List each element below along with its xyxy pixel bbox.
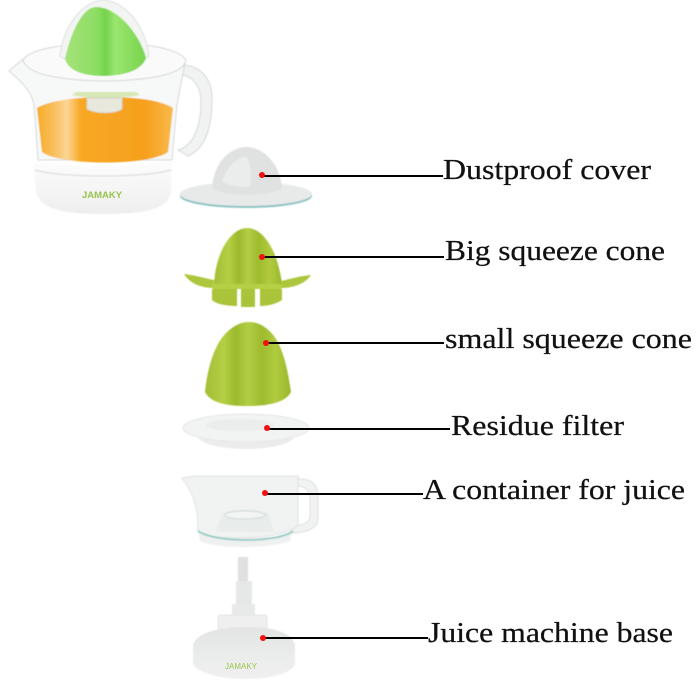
leader: juice container xyxy=(262,490,423,496)
orange juice xyxy=(37,97,173,162)
base brand: JAMAKY xyxy=(82,190,123,201)
label: machine base: Juice machine base xyxy=(428,617,673,649)
leader: big squeeze cone xyxy=(259,254,444,260)
label: dustproof cover: Dustproof cover xyxy=(443,154,651,186)
leader: machine base xyxy=(260,635,428,641)
teal rim xyxy=(198,531,293,540)
label: big squeeze cone: Big squeeze cone xyxy=(445,235,665,267)
part: residue filter xyxy=(183,414,309,449)
lid xyxy=(23,43,186,81)
leader: small squeeze cone xyxy=(263,340,444,346)
label: juice container: A container for juice xyxy=(423,474,685,506)
base brand: JAMAKY xyxy=(225,662,258,671)
foot xyxy=(198,532,292,547)
white base xyxy=(33,160,172,214)
inner collar xyxy=(216,510,274,532)
green ring under lid xyxy=(72,92,140,98)
green cone xyxy=(65,7,146,76)
part: juice container xyxy=(182,476,318,547)
handle xyxy=(292,479,318,533)
label: residue filter: Residue filter xyxy=(451,410,624,442)
leader: dustproof cover xyxy=(259,172,443,178)
leader: residue filter xyxy=(264,425,450,431)
assembled juicer photo xyxy=(9,0,212,214)
jug handle xyxy=(178,65,212,156)
part: big squeeze cone xyxy=(184,228,311,307)
part: machine base xyxy=(193,557,295,679)
clear dome xyxy=(60,0,149,64)
spindle xyxy=(87,98,122,113)
part: dustproof cover xyxy=(180,147,312,208)
label: small squeeze cone: small squeeze cone xyxy=(445,323,692,355)
base seam xyxy=(35,170,171,176)
jug body xyxy=(9,59,185,160)
glass body xyxy=(182,476,298,538)
part: small squeeze cone xyxy=(205,322,291,406)
